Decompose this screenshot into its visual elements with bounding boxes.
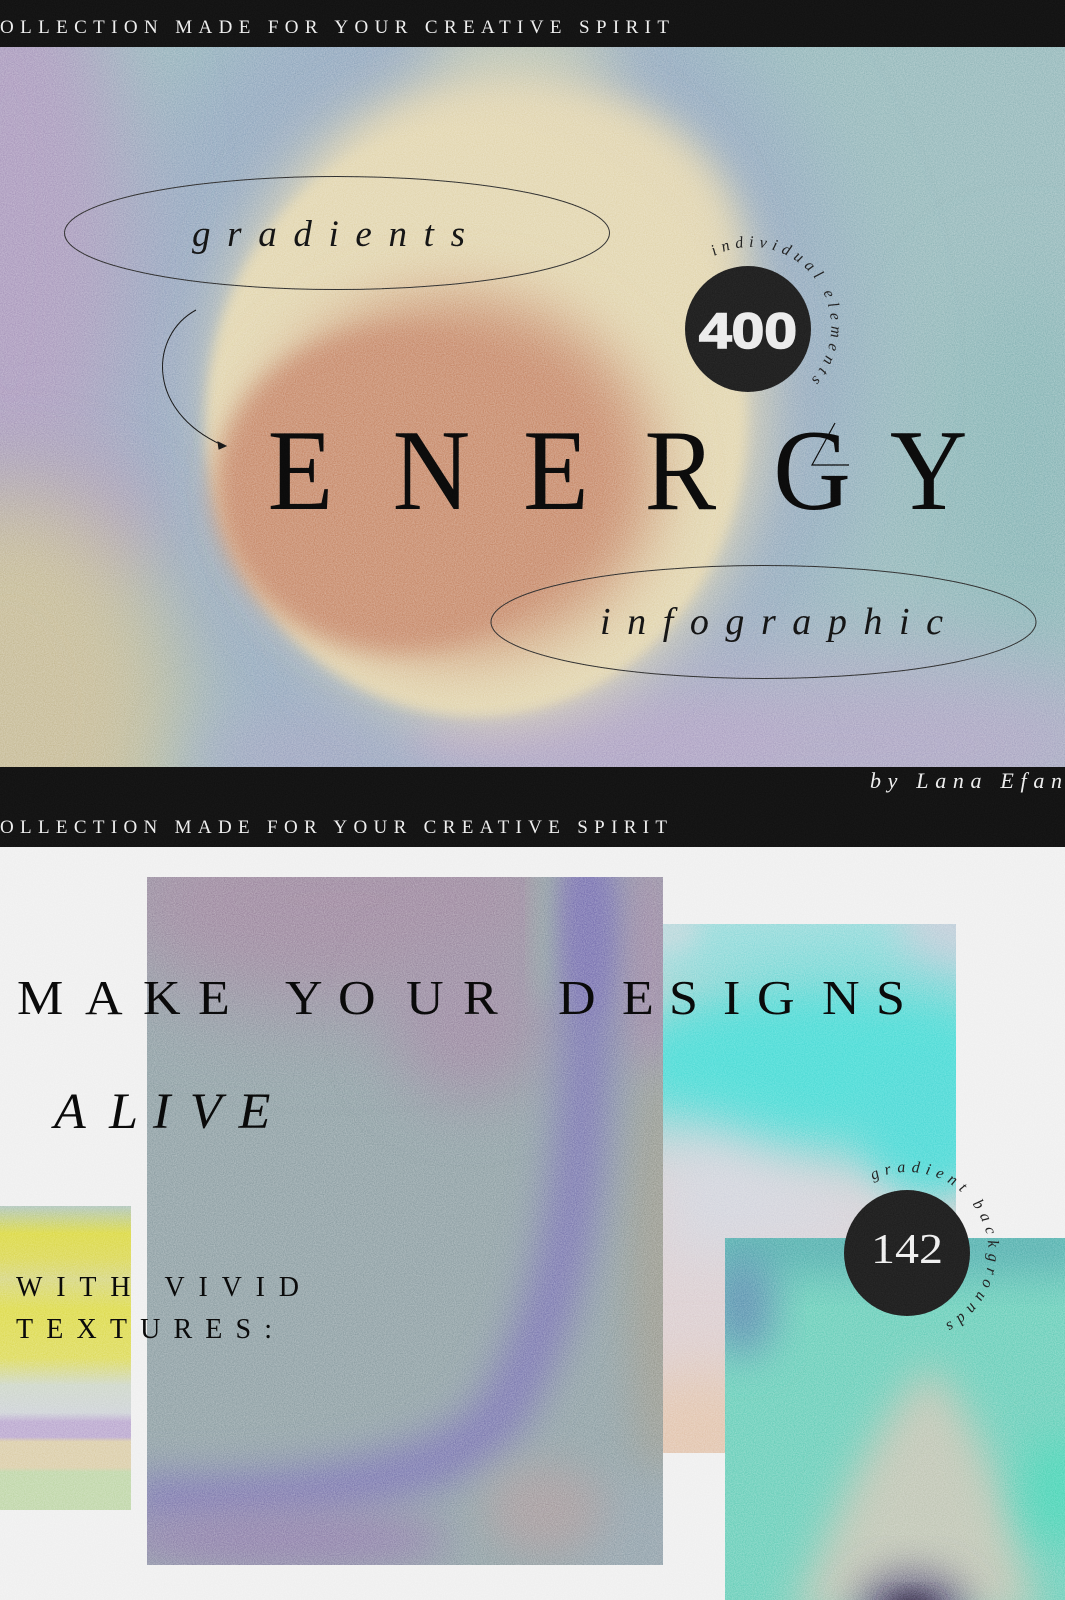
badge: 400 individual elements: 400 (699, 303, 797, 359)
panel: green gradient swatch (725, 1238, 1065, 1600)
panel: hero gradient (0, 47, 1065, 767)
panel: teal gradient swatch (663, 924, 956, 1453)
ellipse label: infographic (491, 566, 1036, 678)
ellipse label: infographic: infographic (600, 601, 943, 643)
panel: main purple gradient (147, 877, 663, 1565)
badge: 142 gradient backgrounds: 142 (871, 1227, 943, 1273)
heading: ALIVE: ALIVE (51, 1083, 270, 1140)
subheading: WITH VIVID TEXTURES: WITH VIVID (16, 1272, 299, 1303)
subheading: WITH VIVID TEXTURES (16, 1272, 299, 1345)
title: ENERGY: ENERGY (268, 406, 967, 535)
arrow: curved pointer to title (163, 310, 226, 449)
credit: by Lana Efan (870, 768, 1062, 793)
panel: striped gradient swatch (0, 1206, 131, 1510)
badge: 142 gradient backgrounds: gradient backgrounds (872, 1162, 1000, 1330)
heading: MAKE YOUR DESIGNS: MAKE YOUR DESIGNS (17, 970, 905, 1025)
subheading: WITH VIVID TEXTURES: TEXTURES: (16, 1314, 272, 1345)
top black bar (0, 0, 1065, 47)
bar tagline: OLLECTION MADE FOR YOUR CREATIVE SPIRIT (0, 17, 669, 38)
ellipse label: gradients (64, 176, 610, 290)
ellipse label: gradients: gradients (192, 214, 465, 255)
bar tagline: OLLECTION MADE FOR YOUR CREATIVE SPIRIT (0, 817, 667, 838)
lower black bar (0, 767, 1065, 847)
badge: 400 individual elements: individual elements (712, 236, 840, 384)
